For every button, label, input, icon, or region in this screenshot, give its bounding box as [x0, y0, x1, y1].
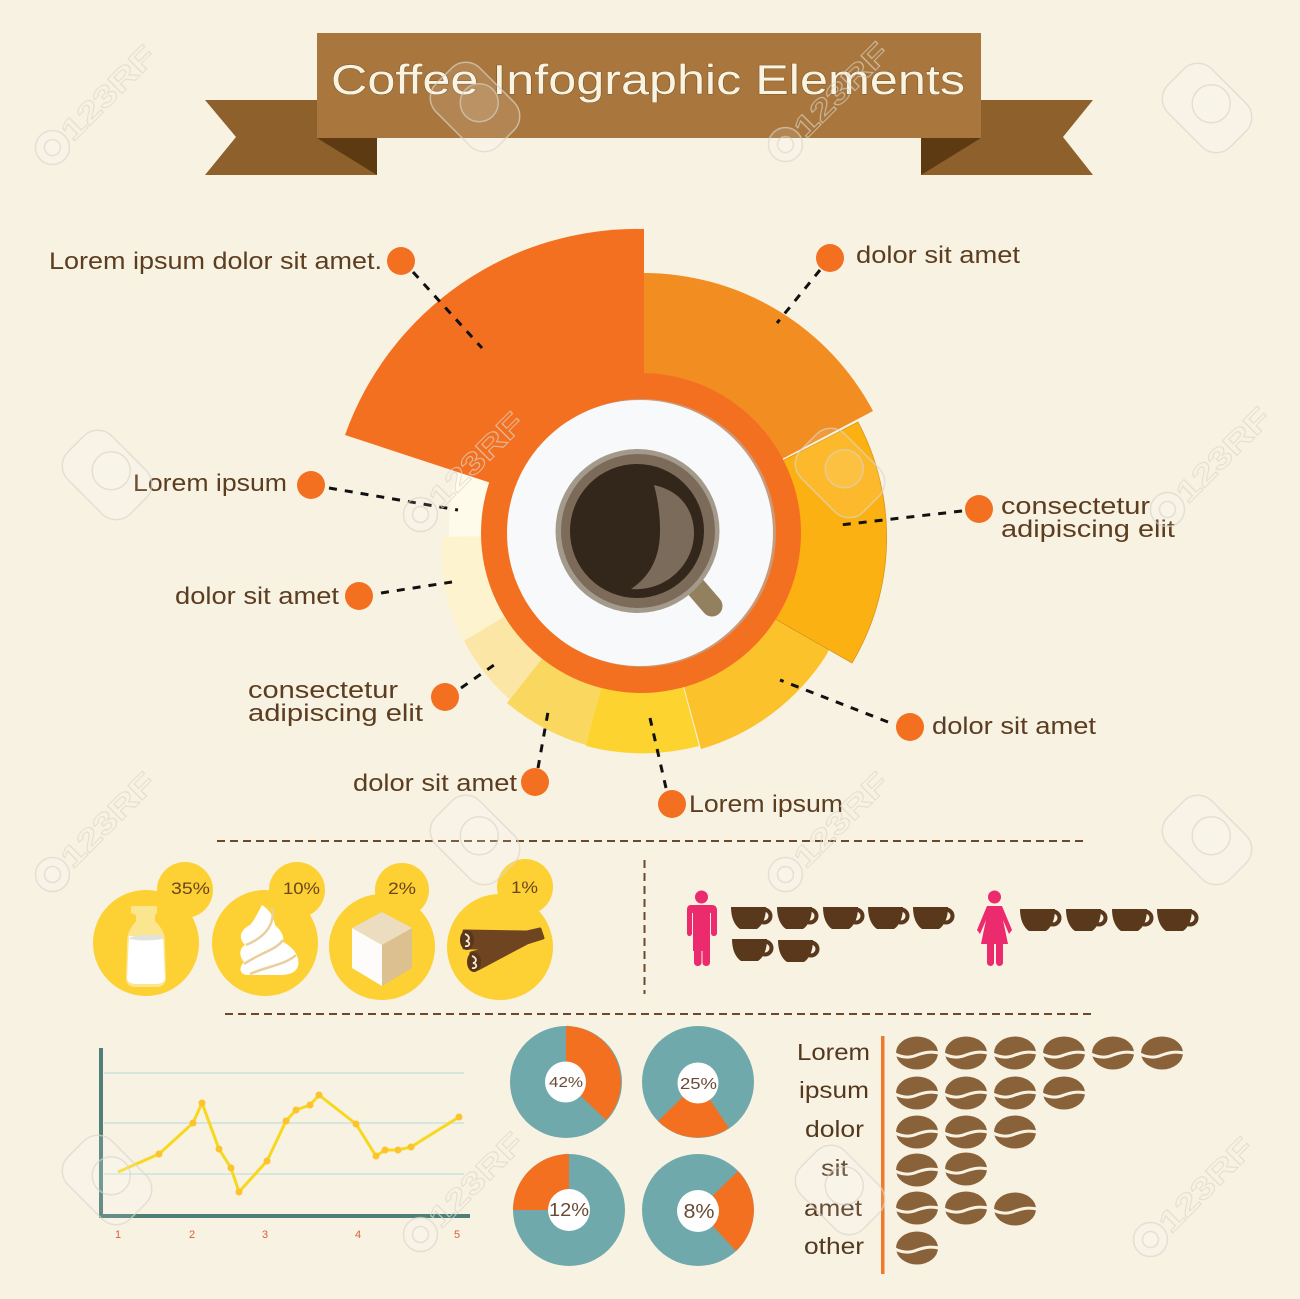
pie: 42% [510, 1026, 622, 1138]
pie: 8%: 8% [684, 1201, 715, 1223]
x axis labels: 4 [355, 1229, 361, 1241]
row labels: ipsum [799, 1077, 869, 1103]
add-in: sugar cube [329, 863, 435, 1000]
stock watermarks: 123RF [423, 406, 531, 515]
banner left tail [205, 100, 377, 175]
callout labels [49, 242, 1175, 818]
panel: coffee add-ins [93, 859, 553, 1000]
icon: coffee cup from above [556, 449, 720, 613]
stock watermarks: 123RF [1170, 401, 1278, 510]
callout labels: adipiscing elit [1001, 516, 1175, 543]
banner left fold [317, 138, 377, 175]
pie: 12% [513, 1154, 625, 1266]
title text: Coffee Infographic Elements [331, 56, 965, 103]
x axis labels: 1 [115, 1229, 121, 1241]
callout labels: Lorem ipsum [133, 470, 287, 497]
segment 2 [642, 273, 873, 533]
add-in: cinnamon [447, 859, 553, 1000]
pie: 25%: 25% [680, 1076, 717, 1093]
icon: woman [977, 890, 1012, 966]
segment 9 [449, 471, 488, 537]
radial chart: coffee segments [345, 229, 887, 753]
stock watermarks: 123RF [55, 39, 163, 148]
x axis labels: 3 [262, 1229, 268, 1241]
chart axes [101, 1048, 470, 1216]
segment 6 [507, 533, 642, 745]
segment 4 [642, 533, 850, 749]
stock watermarks: 123RF [788, 766, 896, 875]
icon: man [687, 890, 717, 966]
pie: 8% [642, 1154, 754, 1266]
bean icons [895, 1036, 1184, 1264]
row labels: Lorem [797, 1039, 870, 1065]
male cup count [731, 907, 952, 962]
x axis labels: 2 [189, 1229, 195, 1241]
row labels: other [804, 1233, 864, 1259]
x axis labels: 5 [454, 1229, 460, 1241]
center ring [481, 373, 801, 693]
callout labels: dolor sit amet [175, 583, 339, 610]
callout labels: dolor sit amet [932, 713, 1096, 740]
callout leader lines [329, 270, 962, 788]
callout labels: consectetur [1001, 493, 1150, 520]
pie charts [510, 1026, 754, 1266]
pie: 42%: 42% [549, 1074, 583, 1091]
stock watermarks: 123RF [55, 766, 163, 875]
stock watermarks: 123RF [788, 36, 896, 145]
banner right tail [921, 100, 1093, 175]
female cup count [1020, 909, 1196, 931]
segment 3 [642, 422, 887, 663]
callout dots [297, 244, 993, 818]
add-in: milk [93, 862, 213, 996]
row labels: amet [804, 1195, 863, 1221]
saucer [507, 399, 776, 667]
data line [118, 1095, 459, 1192]
segment 8 [442, 533, 642, 650]
row labels [797, 1039, 870, 1259]
stock watermarks: 123RF [423, 1126, 531, 1235]
callout labels: consectetur [248, 677, 398, 704]
banner right fold [921, 138, 981, 175]
add-in: sugar cube: 2% [388, 879, 416, 898]
line chart [101, 1048, 470, 1241]
segment 5 [586, 533, 699, 753]
banner main panel [317, 33, 981, 138]
pie: 25% [642, 1026, 754, 1138]
row labels: sit [821, 1155, 849, 1181]
callout labels: adipiscing elit [248, 700, 423, 727]
panel: cups by gender [687, 890, 1196, 966]
chart callouts [49, 242, 1175, 818]
callout labels: dolor sit amet [856, 242, 1020, 269]
segment 1, largest [345, 229, 644, 533]
callout labels: Lorem ipsum dolor sit amet. [49, 248, 382, 275]
x axis labels [115, 1229, 460, 1241]
callout labels: Lorem ipsum [689, 791, 843, 818]
pie: 12%: 12% [549, 1200, 589, 1220]
add-in: cream: 10% [283, 879, 320, 898]
callout labels: dolor sit amet [353, 770, 517, 797]
title banner [205, 33, 1093, 175]
stock watermarks: 123RF [1153, 1131, 1261, 1240]
axis bar [881, 1036, 884, 1274]
add-in: milk: 35% [171, 879, 210, 898]
add-in: cinnamon: 1% [511, 878, 538, 897]
add-in: cream [212, 862, 325, 996]
data points [156, 1092, 462, 1196]
segment 7 [464, 533, 642, 710]
row labels: dolor [805, 1116, 864, 1142]
pictogram chart: coffee beans [797, 1036, 1184, 1274]
